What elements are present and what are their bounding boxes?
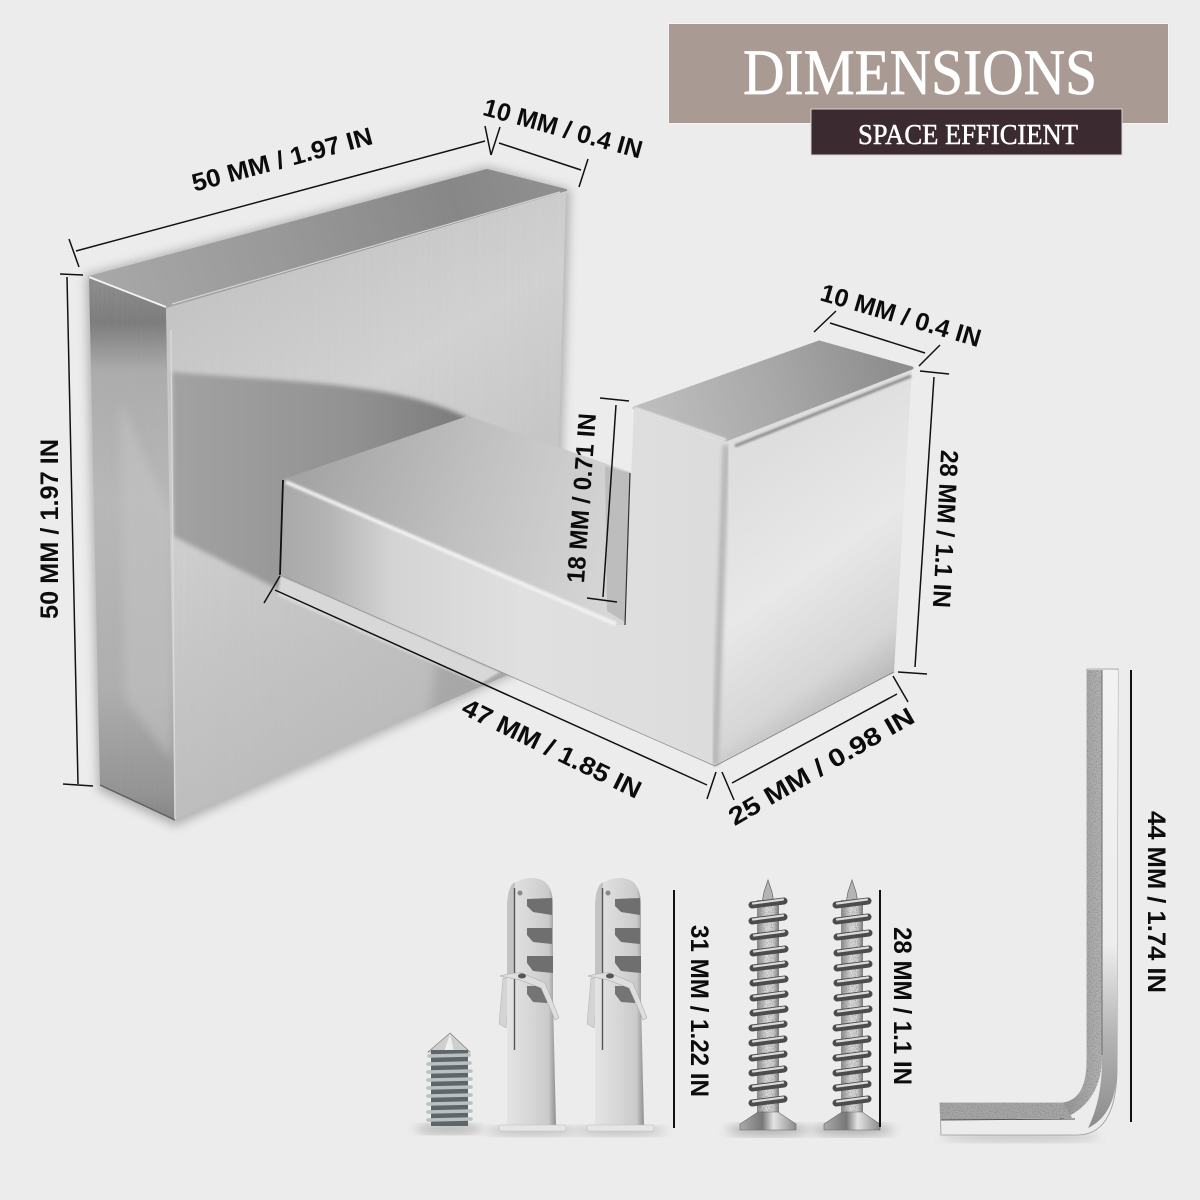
icon: screw 2 (810, 880, 894, 1135)
dimension: plate width (69, 122, 491, 267)
dimension: hook thickness: 10 MM / 0.4 IN (817, 279, 984, 353)
title: dimensions: DIMENSIONS (743, 37, 1097, 109)
icon: screw 1 (726, 880, 810, 1135)
dimension: hex key length: 44 MM / 1.74 IN (1142, 811, 1170, 993)
icon: hex key (940, 669, 1118, 1141)
dimension: hook width: 25 MM / 0.98 IN (724, 702, 919, 831)
plate shadow (86, 167, 570, 826)
dimension: plate height: 50 MM / 1.97 IN (36, 439, 64, 619)
icon: set screw (415, 1033, 483, 1133)
dimension: hook projection (264, 576, 716, 804)
dimension: screw length: 28 MM / 1.1 IN (888, 927, 916, 1085)
upright right face (715, 368, 912, 765)
dimension: hook opening (562, 398, 629, 602)
icon: wall anchor 2 (574, 878, 666, 1135)
title banner (668, 24, 1168, 155)
dimension: hook width (722, 676, 919, 831)
upright top face (634, 342, 912, 440)
hook illustration (85, 167, 912, 826)
dimension: plate depth: 10 MM / 0.4 IN (480, 94, 645, 164)
dimension: hook height: 28 MM / 1.1 IN (927, 449, 963, 609)
mounting plate (85, 170, 570, 825)
arm and upright side face (280, 408, 726, 765)
dimension: hook height (898, 371, 963, 674)
icon: wall anchor 1 (486, 878, 578, 1135)
hook edges (280, 371, 911, 766)
arm top face (284, 417, 630, 625)
subtitle: space efficient: SPACE EFFICIENT (858, 120, 1078, 151)
title panel (668, 24, 1168, 124)
dimension: plate height (36, 274, 93, 786)
dimension: hook projection: 47 MM / 1.85 IN (457, 693, 646, 804)
subtitle panel (811, 109, 1122, 155)
dimension: plate width: 50 MM / 1.97 IN (189, 122, 376, 198)
dimension: hook opening: 18 MM / 0.71 IN (562, 412, 602, 584)
arm underside reflection (278, 575, 500, 684)
dimension: anchor length: 31 MM / 1.22 IN (685, 925, 713, 1097)
